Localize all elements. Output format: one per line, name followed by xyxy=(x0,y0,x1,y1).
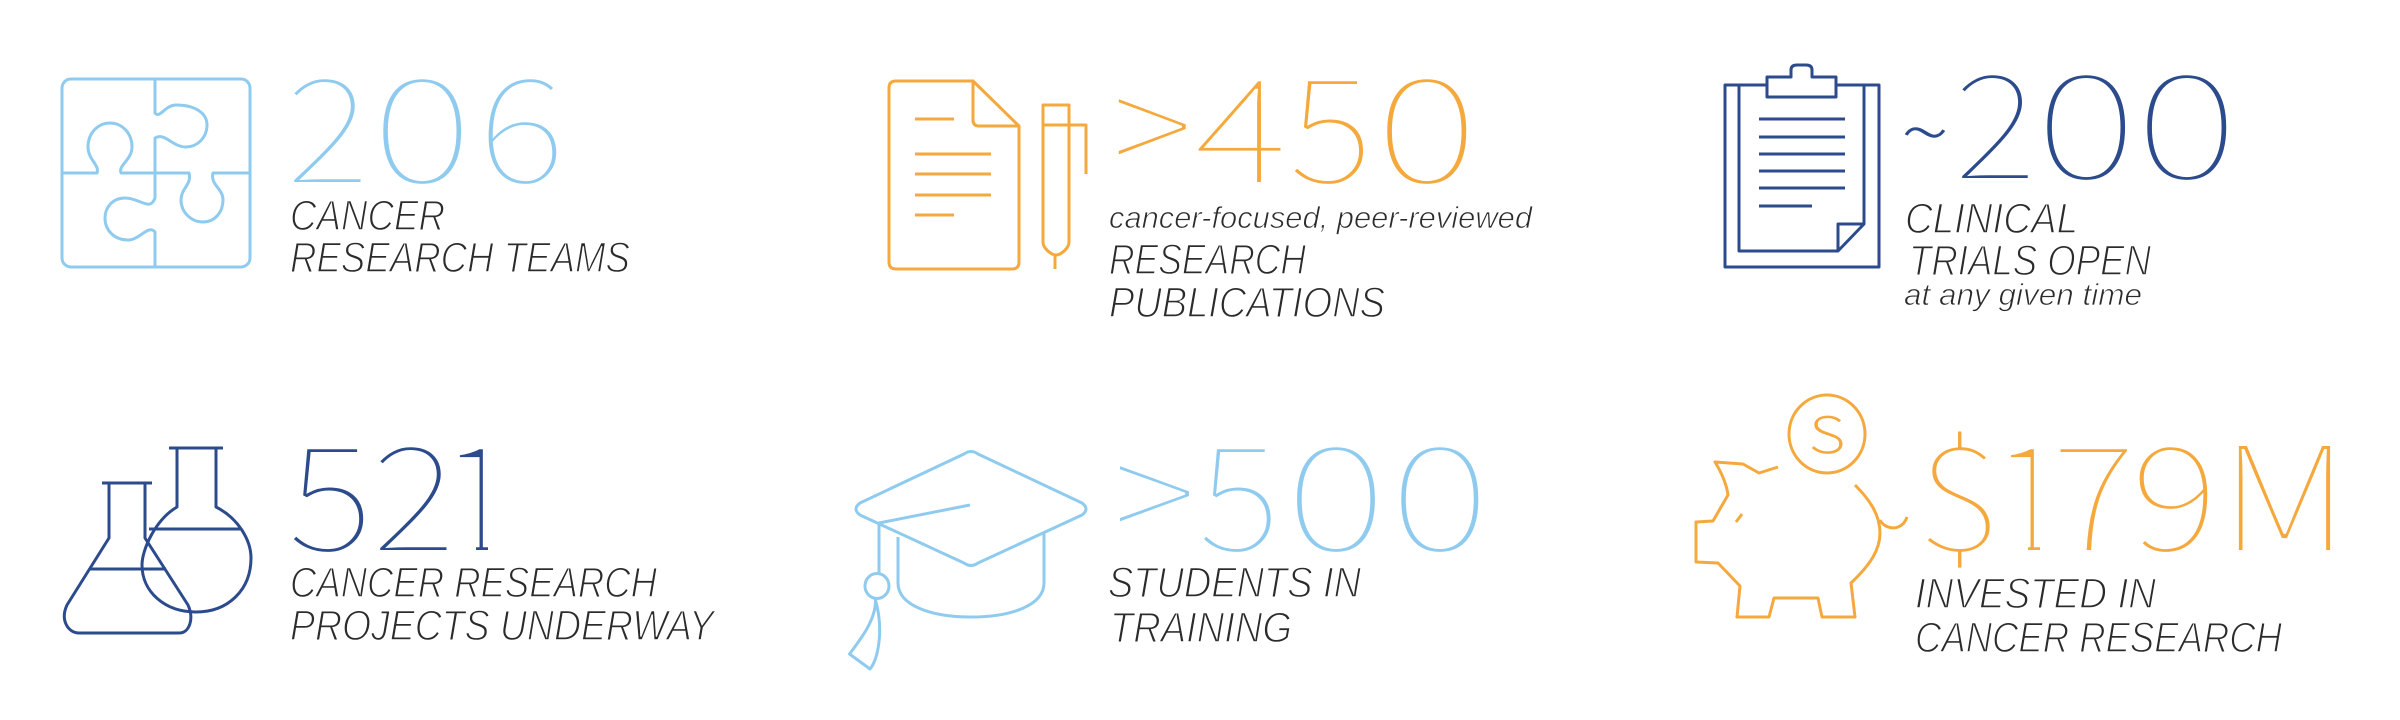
number: >500: > xyxy=(1113,379,1196,590)
number: >450: 5 xyxy=(1289,15,1373,226)
label: cancer research teams xyxy=(290,192,630,282)
panel: invested in cancer research xyxy=(1696,383,2350,662)
number: $179M: M xyxy=(2219,383,2350,594)
panel: cancer research teams xyxy=(62,15,630,282)
number: >500: 0 xyxy=(1389,383,1490,594)
icon: flasks xyxy=(64,448,251,633)
icon: piggy bank xyxy=(1696,462,1907,617)
label: research publications xyxy=(1109,200,1534,327)
icon: clipboard xyxy=(1725,65,1879,267)
label: research publications: cancer-focused, peer-reviewed xyxy=(1109,200,1534,235)
number: >500: 0 xyxy=(1285,383,1387,594)
label: research publications: RESEARCH xyxy=(1109,236,1307,284)
label: cancer research projects underway: PROJECTS UNDERWAY xyxy=(290,602,717,650)
label: clinical trials open: at any given time xyxy=(1904,277,2142,312)
label: research publications: PUBLICATIONS xyxy=(1109,279,1385,327)
icon: pen xyxy=(1043,105,1086,269)
panel: research publications xyxy=(889,12,1534,327)
number: $179M: $ xyxy=(1915,383,2002,594)
number: $179M: 1 xyxy=(1989,383,2070,594)
label: cancer research projects underway xyxy=(290,559,717,650)
panel: students in training xyxy=(850,379,1490,669)
number: 206: 0 xyxy=(371,15,473,226)
infographic xyxy=(60,64,2330,671)
label: invested in cancer research xyxy=(1915,570,2283,662)
number: >450: 0 xyxy=(1375,15,1478,226)
number: >500: 5 xyxy=(1198,383,1280,594)
number: ~200: 2 xyxy=(1954,11,2037,222)
number: ~200: ~ xyxy=(1901,72,1949,182)
number: 521: 1 xyxy=(438,383,518,594)
number: 206: 6 xyxy=(478,15,566,226)
number: ~200: 0 xyxy=(2135,11,2238,222)
icon: coin: S xyxy=(1809,396,1845,468)
number: 521 xyxy=(294,447,488,552)
label: invested in cancer research: INVESTED IN xyxy=(1915,570,2157,618)
label: students in training: STUDENTS IN xyxy=(1108,559,1362,607)
number: ~200: 0 xyxy=(2035,11,2137,222)
number: $179M: 7 xyxy=(2052,383,2136,594)
number: 206: 2 xyxy=(286,15,370,226)
label: cancer research projects underway: CANCER RESEARCH xyxy=(290,559,658,607)
icon: puzzle xyxy=(62,79,250,267)
number: >450: 4 xyxy=(1194,15,1288,226)
number: 521: 2 xyxy=(372,383,456,594)
label: cancer research teams: RESEARCH TEAMS xyxy=(290,234,630,282)
number: 206 xyxy=(286,15,566,226)
icon: coin xyxy=(1789,395,1865,473)
panel: clinical trials xyxy=(1725,11,2238,312)
label: clinical trials open: CLINICAL xyxy=(1905,195,2078,243)
number: >500 xyxy=(1113,379,1490,594)
label: students in training xyxy=(1108,559,1362,652)
icon: document xyxy=(889,81,1019,269)
icon: graduation cap xyxy=(850,452,1086,669)
number: >450: > xyxy=(1112,12,1192,223)
label: invested in cancer research: CANCER RESEARCH xyxy=(1915,614,2283,662)
number: 521: 5 xyxy=(288,383,373,594)
number: >450 xyxy=(1112,12,1478,226)
number: ~200 xyxy=(1901,11,2238,222)
label: students in training: TRAINING xyxy=(1110,604,1292,652)
number: $179M: 9 xyxy=(2130,383,2218,594)
number: $179M xyxy=(1928,432,2330,568)
label: cancer research teams: CANCER xyxy=(290,192,445,240)
label: clinical trials open xyxy=(1904,195,2152,312)
panel: research projects xyxy=(62,446,715,640)
label: clinical trials open: TRIALS OPEN xyxy=(1909,237,2152,285)
